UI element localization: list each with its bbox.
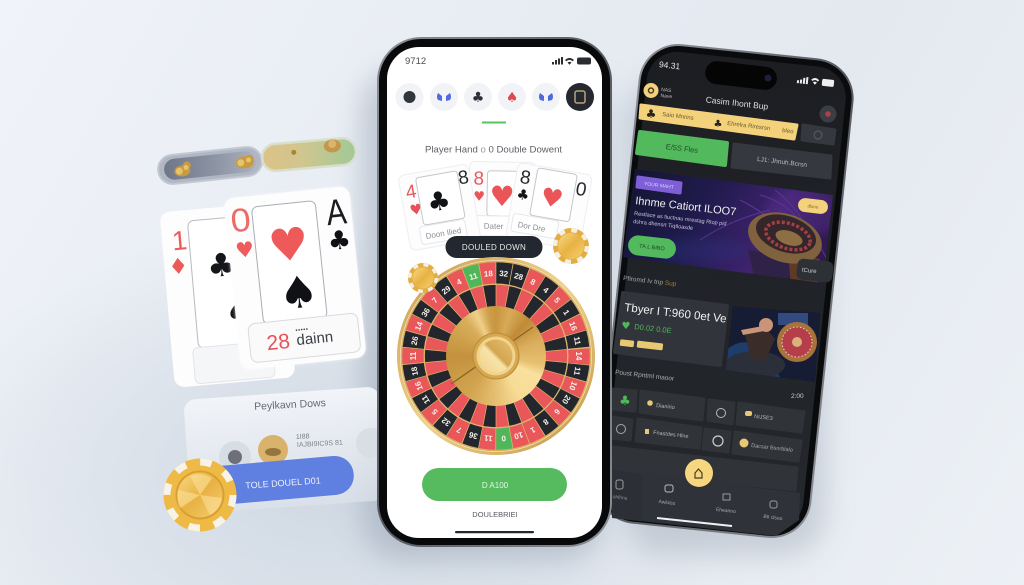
banner description second line: dshra dhensrt Tiqtloasde: [633, 219, 693, 232]
inner panel: [187, 213, 288, 349]
mini card centre: ♥: [489, 180, 515, 213]
inner pocket ring: [436, 296, 556, 416]
bottom navigation: [612, 470, 800, 536]
mini card centre: Dater: [484, 222, 504, 231]
footer box: [192, 341, 275, 384]
mini card right: ♥: [538, 182, 565, 214]
pocket numbers: 11: [468, 271, 479, 282]
header action button: [820, 106, 836, 122]
pocket numbers: 28: [513, 271, 525, 282]
grey pill: [157, 146, 263, 185]
pocket numbers: 11: [572, 366, 582, 377]
pocket numbers: 5: [430, 407, 440, 416]
button caption: DOULEBRIEI: [472, 510, 518, 519]
outer pocket ring: [406, 266, 586, 446]
banner heading: Ihnme Catiort ILOO7: [635, 195, 737, 218]
tile icons and labels: NIJSE3: [754, 414, 773, 422]
mini card right: 8: [518, 167, 532, 189]
panel heading: Peylkavn Dows: [254, 397, 326, 413]
back playing card: [160, 202, 295, 388]
right phone: dark casino lobby: [157, 37, 858, 547]
tile icons and labels: ♣: [619, 394, 631, 409]
pocket numbers: 16: [567, 320, 579, 332]
yellow promo bar: ♣: [714, 119, 722, 130]
yellow promo bar: bleo: [782, 128, 794, 135]
double down pill: DOULED DOWN: [462, 243, 526, 252]
pocket numbers: 32: [440, 415, 453, 428]
grey action button: LJ1: Jhnuh.Bcrsn: [757, 156, 808, 169]
gold token: [258, 435, 288, 465]
wheel hub: [473, 333, 519, 379]
game tiles: [612, 389, 804, 490]
large gold casino chip: [164, 458, 236, 532]
pocket numbers: 29: [440, 284, 453, 296]
pocket numbers: 4: [455, 277, 464, 287]
club suit: ♣: [205, 245, 237, 285]
green action button: [637, 132, 727, 165]
camera dot: [764, 74, 772, 82]
yellow promo bar: ♣: [646, 107, 656, 121]
pocket numbers: 16: [413, 380, 425, 392]
banner description: Restlace as tiuctnau mrestag Rtop pid: [634, 211, 727, 228]
banner dark tag: [796, 258, 834, 283]
spin button: D A100: [482, 481, 509, 490]
phone shadows: [362, 70, 825, 560]
banner green button: TA.L BIBO: [639, 244, 666, 253]
yellow promo bar: Ehrelra Riresrsn: [727, 121, 771, 132]
mini card right: ♣: [515, 187, 530, 204]
pocket numbers: 20: [560, 393, 572, 406]
pocket numbers: [409, 269, 583, 443]
score box: dainn: [296, 328, 334, 349]
pocket numbers: 36: [467, 430, 479, 441]
score box: 28: [266, 330, 291, 355]
pocket numbers: 7: [455, 425, 463, 435]
ring separators: [424, 284, 568, 428]
pocket numbers: 14: [574, 352, 583, 361]
banner yellow tag: [797, 197, 829, 215]
status time: 94.31: [659, 59, 681, 71]
player card: Tbyer I T:960 0et Ve: [624, 302, 727, 326]
payout panel: [183, 386, 387, 514]
left pills with gold nuggets: [157, 137, 357, 185]
promo banner: [612, 169, 845, 536]
mini card centre: [468, 161, 536, 245]
pocket numbers: 10: [567, 380, 579, 392]
status time: 9712: [405, 56, 426, 67]
pocket numbers: 8: [541, 417, 550, 427]
mini card left: ♣: [425, 185, 453, 219]
big heart: ♥: [266, 217, 311, 273]
card value: 1: [171, 225, 188, 256]
tile icons and labels: Dianirio: [656, 403, 675, 411]
clock text: 2:00: [791, 393, 804, 400]
mini card left: [398, 164, 481, 251]
inner dark pockets: [424, 284, 568, 428]
category icon row: ♠: [506, 90, 518, 106]
pocket numbers: 8: [529, 277, 537, 287]
tile icons and labels: [616, 394, 793, 454]
phone frame: [592, 40, 858, 542]
yellow promo bar: [640, 105, 797, 139]
bottom navigation: BII clsoo: [763, 514, 783, 522]
gold chip right: [553, 228, 589, 264]
front playing card: [223, 186, 367, 370]
spin button: [422, 468, 567, 501]
pocket numbers: 4: [541, 285, 551, 295]
pocket numbers: 1: [561, 308, 571, 317]
pocket numbers: 11: [483, 433, 493, 443]
pocket numbers: 32: [499, 269, 509, 279]
profile text: NAS: [661, 87, 672, 94]
grey action button: [732, 144, 831, 178]
tile icons and labels: Dacsar Bsnrblalo: [751, 443, 793, 454]
grey token: [219, 441, 251, 473]
banner yellow tag: dlsou: [807, 203, 819, 210]
faded token: [356, 428, 386, 458]
pocket numbers: 36: [420, 306, 432, 319]
bottom navigation: Eheanno: [716, 507, 736, 515]
pocket numbers: 14: [413, 320, 425, 332]
token detail: IAJBI9IC9S 81: [297, 440, 343, 449]
big spade: ♠: [276, 266, 321, 321]
roulette wheel: [397, 257, 595, 455]
section heading: promoted: Pfiromd Iv tnp Sup: [623, 275, 677, 288]
banner light swirl: [668, 190, 833, 282]
mini card centre: 8: [473, 168, 484, 190]
phone 1: white roulette screen: [377, 37, 612, 547]
card value A: A: [324, 190, 348, 233]
score box: [248, 313, 361, 363]
pocket numbers: 10: [513, 430, 524, 441]
mini card left: 8: [456, 167, 471, 189]
banner purple tag: YOUR MAHT: [644, 181, 674, 191]
pocket numbers: 6: [552, 407, 562, 417]
double down pill: [446, 236, 542, 258]
banner roulette wheel: [748, 212, 822, 282]
pocket numbers: 1: [528, 425, 537, 435]
banner green button: [627, 234, 677, 260]
score box: •••••: [295, 327, 309, 334]
small heart: ♥: [234, 237, 255, 263]
yellow promo bar: Saio Mnrins: [662, 112, 694, 122]
mini card right: 0: [574, 179, 588, 201]
pocket numbers: 5: [552, 296, 562, 305]
pocket numbers: 7: [430, 295, 440, 305]
status icons: [797, 76, 834, 87]
bottom navigation: ohlhns: [612, 494, 628, 502]
category icon row: [396, 83, 594, 111]
pocket numbers: 18: [410, 365, 420, 376]
banner purple tag: [637, 177, 681, 193]
dynamic island: [704, 60, 778, 91]
status icons: [552, 57, 591, 65]
bottom navigation: Awlulss: [658, 499, 676, 507]
pocket numbers: 18: [484, 269, 494, 279]
small grey button: [802, 125, 835, 144]
pocket numbers: 11: [572, 336, 582, 346]
mini card left: ♥: [409, 201, 424, 219]
wheel spoke: [451, 327, 533, 384]
pocket numbers: 11: [409, 351, 418, 360]
hand heading: Player Hand o 0 Double Dowent: [425, 144, 562, 156]
floating yellow home button: [685, 459, 713, 487]
gold centre disc: [446, 306, 546, 406]
diamond suit: ♦: [168, 254, 189, 281]
inner panel: [251, 200, 327, 325]
category icon row: ♣: [472, 90, 484, 106]
mini card centre: ♥: [473, 189, 485, 205]
pocket numbers: 26: [410, 335, 420, 346]
pocket numbers: 0: [500, 433, 506, 443]
mini card left: 4: [404, 181, 419, 204]
player card: D0.02 0.0E: [634, 322, 672, 335]
green action button: E/5S Fles: [665, 142, 699, 155]
phone frame: [377, 37, 612, 547]
tile icons and labels: Fnastdes Hlne: [653, 430, 689, 440]
gold chip left of wheel: [408, 263, 438, 293]
mini card right: [505, 162, 592, 250]
player card: [615, 293, 727, 365]
pocket numbers: 11: [420, 393, 432, 405]
blue action pill: TOLE DOUEL D01: [245, 475, 321, 491]
token stats: 1I88: [296, 433, 310, 441]
gold green pill: [261, 137, 357, 172]
profile avatar: [644, 83, 658, 98]
profile text: Nave: [660, 93, 673, 100]
banner dark tag: tCure: [802, 268, 817, 275]
blue action pill: [199, 454, 355, 507]
home indicator: [657, 518, 732, 526]
club suit: ♣: [326, 225, 353, 257]
green active indicator: [482, 122, 506, 124]
section heading: popular: Poust Rpntml maoor: [615, 369, 675, 383]
game image: roulette dealer: [721, 306, 820, 385]
mini card left: Doon Ilied: [425, 226, 462, 241]
mini card right: Dor Dre: [517, 220, 547, 234]
home indicator: [455, 531, 534, 533]
spade suit: ♠: [223, 291, 255, 331]
header title: Casim Ihont Bup: [705, 94, 769, 112]
card value 0: 0: [229, 200, 253, 239]
player card: ♥: [622, 321, 631, 332]
